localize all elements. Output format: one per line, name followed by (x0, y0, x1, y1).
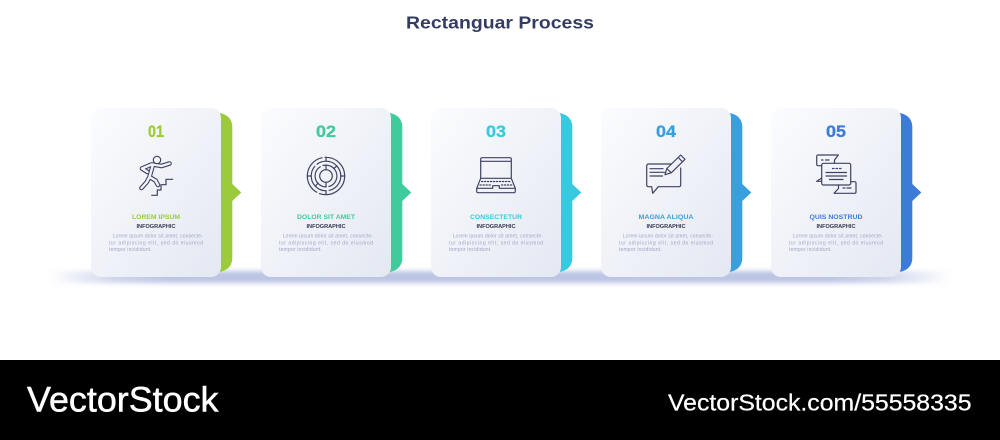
body text: tempor incididunt. (109, 247, 152, 253)
panel: step 02 (261, 108, 411, 277)
body text: Lorem ipsum dolor sit amet, consecte- (113, 234, 203, 240)
tab with arrow: cyan (559, 113, 581, 272)
card (91, 108, 221, 277)
tab with arrow: royal blue (899, 113, 921, 272)
label: MAGNA ALIQUA (638, 214, 694, 221)
icon: laptop (477, 158, 515, 193)
card (431, 108, 561, 277)
body text: Lorem ipsum dolor sit amet, consecte- (623, 234, 713, 240)
subtitle: INFOGRAPHIC (476, 224, 516, 230)
body text: tempor incididunt. (449, 247, 492, 253)
label: DOLOR SIT AMET (297, 214, 356, 221)
label: CONSECTETUR (470, 214, 522, 221)
number: 04 (656, 123, 677, 141)
ground shadow (50, 271, 950, 283)
card (601, 108, 731, 277)
panel: step 05 (771, 108, 921, 277)
subtitle: INFOGRAPHIC (646, 224, 686, 230)
panel: step 04 (601, 108, 751, 277)
icon: chat bubbles (817, 155, 856, 193)
footer logo: VectorStock (27, 379, 219, 419)
number: 01 (148, 123, 164, 141)
body text: tur adipiscing elit, sed do eiusmod (449, 240, 543, 246)
card (261, 108, 391, 277)
body text: tur adipiscing elit, sed do eiusmod (789, 240, 883, 246)
label: QUIS NOSTRUD (810, 214, 863, 221)
body text: tempor incididunt. (789, 247, 832, 253)
body text (449, 234, 543, 253)
body text (109, 234, 203, 253)
body text: Lorem ipsum dolor sit amet, consecte- (453, 234, 543, 240)
body text: tur adipiscing elit, sed do eiusmod (619, 240, 713, 246)
title: Rectanguar Process (406, 12, 594, 32)
footer url: VectorStock.com/55558335 (668, 390, 972, 416)
body text: Lorem ipsum dolor sit amet, consecte- (283, 234, 373, 240)
tab with arrow: blue (729, 113, 751, 272)
body text (789, 234, 883, 253)
panel: step 01 (91, 108, 241, 277)
body text: Lorem ipsum dolor sit amet, consecte- (793, 234, 883, 240)
subtitle: INFOGRAPHIC (306, 224, 346, 230)
icon: running up stairs (142, 156, 173, 195)
body text (279, 234, 373, 253)
card (771, 108, 901, 277)
tab with arrow: green (219, 113, 241, 272)
body text: tempor incididunt. (619, 247, 662, 253)
tab with arrow: teal (389, 113, 411, 272)
body text: tempor incididunt. (279, 247, 322, 253)
panel: step 03 (431, 108, 581, 277)
body text: tur adipiscing elit, sed do eiusmod (109, 240, 203, 246)
number: 02 (316, 123, 336, 141)
body text: tur adipiscing elit, sed do eiusmod (279, 240, 373, 246)
subtitle: INFOGRAPHIC (816, 224, 856, 230)
body text (619, 234, 713, 253)
subtitle: INFOGRAPHIC (136, 224, 176, 230)
icon: message with pen (647, 155, 685, 193)
label: LOREM IPSUM (132, 214, 180, 221)
number: 03 (486, 123, 506, 141)
icon: maze (307, 157, 345, 195)
footer bar (0, 360, 1000, 440)
number: 05 (826, 123, 846, 141)
